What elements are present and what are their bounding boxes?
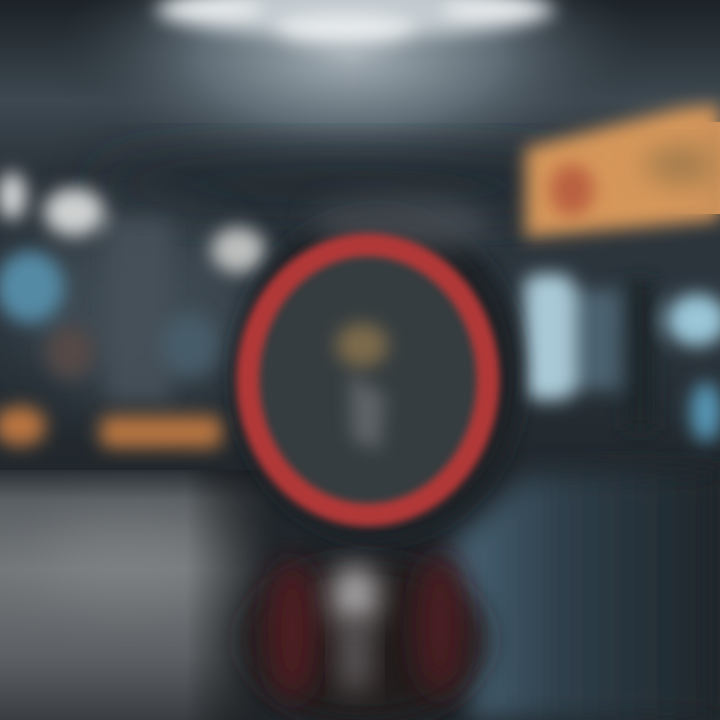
floor left xyxy=(0,470,300,720)
emblem dark backing xyxy=(233,210,523,540)
left orange lights xyxy=(0,406,222,448)
orange sign xyxy=(525,104,720,238)
red ring emblem xyxy=(233,197,523,540)
floor right xyxy=(450,470,720,720)
right background lights xyxy=(524,274,720,442)
emblem centre figure xyxy=(336,323,388,450)
left background lights xyxy=(0,172,265,400)
emblem inner disc xyxy=(250,244,486,516)
red ring xyxy=(248,245,488,515)
emblem reflection xyxy=(243,555,487,720)
emblem outer halo xyxy=(310,197,490,253)
ceiling lights xyxy=(155,0,555,45)
